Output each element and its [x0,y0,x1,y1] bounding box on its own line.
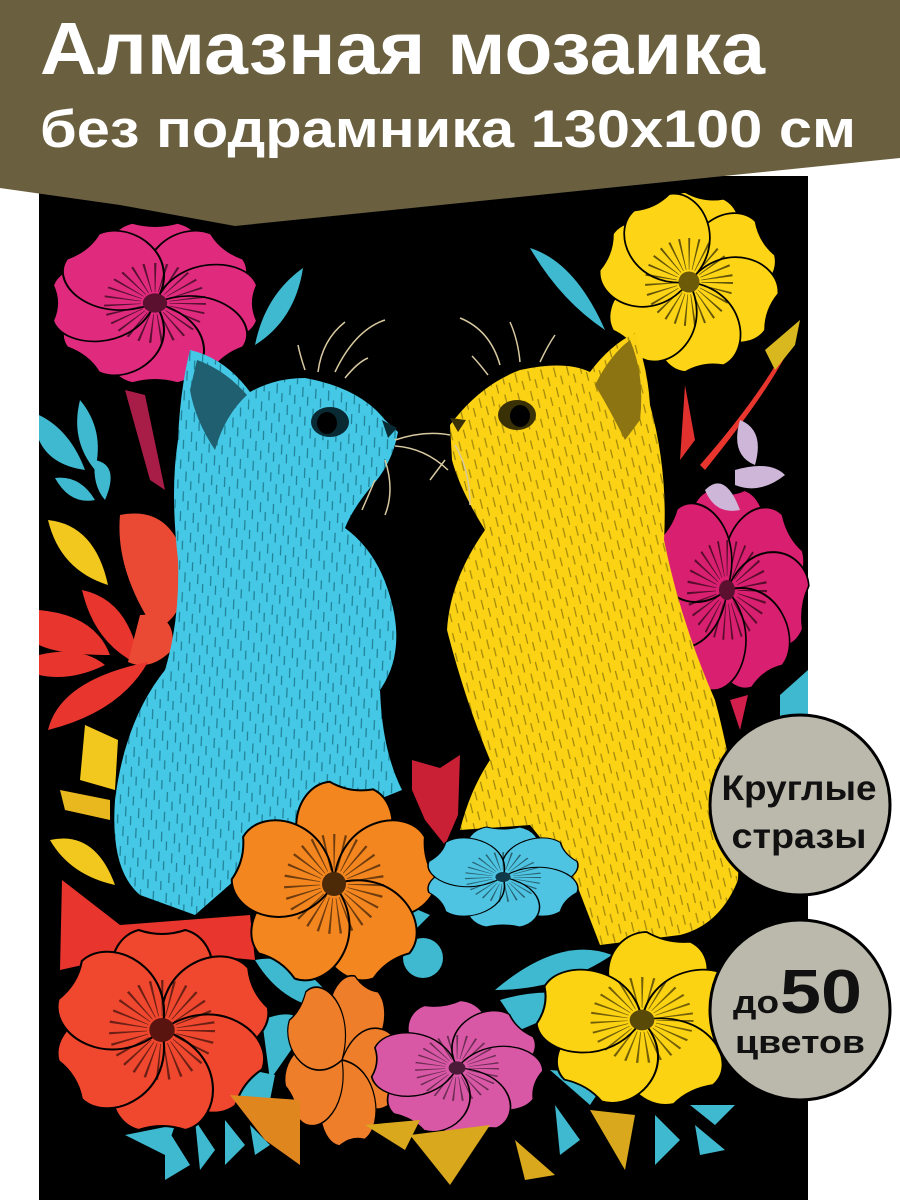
cat whiskers [298,318,555,515]
flower: red bottom left [45,930,280,1130]
badge: up to 50 colours: 50 [780,958,862,1027]
badge: up to 50 colours: до [733,984,779,1020]
badge: round rhinestones: Круглые [722,769,876,808]
cat: yellow [447,333,739,945]
flower: pink lower [370,997,549,1140]
foliage: bottom teal leaves [125,900,735,1180]
subtitle: без подрамника 130х100 см [40,100,856,159]
flower: orange centre [225,777,443,993]
foliage: right side leaves [530,248,808,730]
badge: round rhinestones [710,715,890,895]
badge: round rhinestones: стразы [732,817,866,856]
title: Алмазная мозаика [40,7,766,90]
cat: blue [114,350,402,915]
flower: yellow top right [592,184,786,376]
foliage: bottom golden leaves [230,1095,635,1185]
banner: olive header [0,0,900,226]
flower: pink top left [48,219,262,387]
flower: yellow lower right [532,926,752,1115]
flower: blue centre [419,827,587,927]
flower: red small centre [412,755,460,845]
flower: orange lower [278,967,404,1150]
foliage: left side leaves [39,268,303,970]
flower: magenta right [641,489,815,701]
badge: up to 50 colours [710,920,890,1100]
panel: black artwork background [39,176,808,1200]
badge: up to 50 colours: цветов [735,1024,865,1060]
